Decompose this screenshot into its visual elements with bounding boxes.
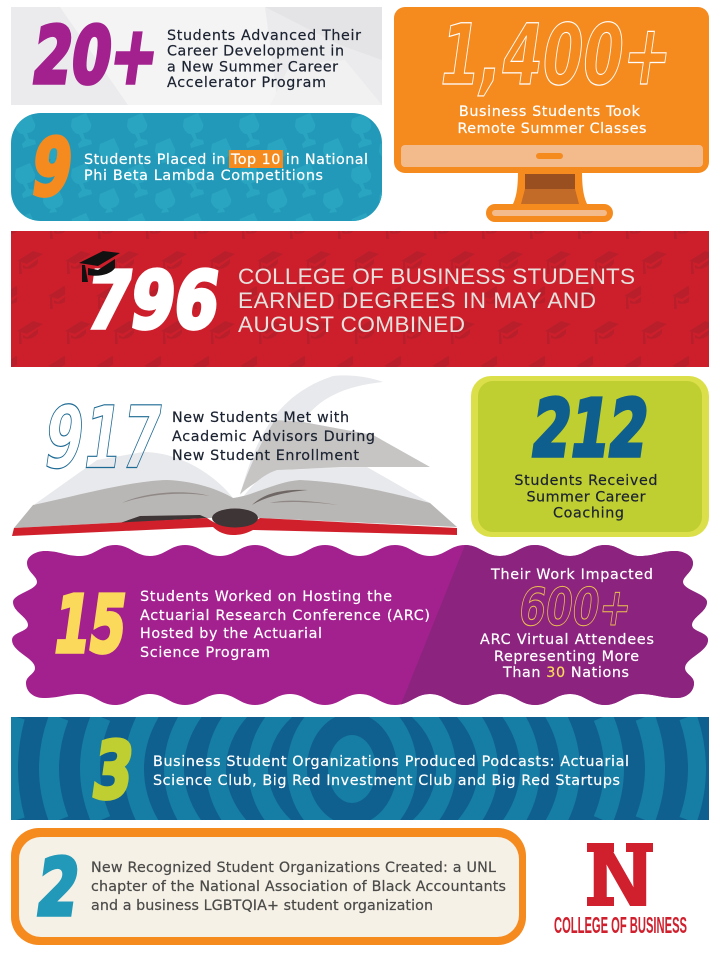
text: attendees description: ARC Virtual Attendees bbox=[480, 632, 654, 648]
text: coaching description: Students Received bbox=[514, 473, 657, 489]
stat: 3: 3 bbox=[87, 726, 139, 816]
stat: 20+: 20+ bbox=[27, 11, 164, 101]
text: organizations description: New Recognized Student Organizations Created: a UNL bbox=[91, 860, 496, 876]
panel: computer monitor with remote classes bbox=[394, 6, 709, 222]
stat: 2: 2 bbox=[31, 843, 85, 933]
text: degrees description: AUGUST COMBINED bbox=[238, 312, 465, 337]
text: competitions description: Students Placed in Top 10 in National bbox=[84, 152, 368, 168]
text: career accelerator description: a New Summer Career bbox=[167, 60, 338, 76]
icon: graduation cap bbox=[79, 251, 120, 282]
text: career accelerator description: Accelerator Program bbox=[167, 75, 326, 91]
text: advisors description: New Student Enrollment bbox=[172, 448, 359, 464]
stat: 9: 9 bbox=[26, 123, 78, 213]
text: conference description: Actuarial Research Conference (ARC) bbox=[140, 608, 430, 624]
text: attendees description: Than 30 Nations bbox=[503, 665, 629, 681]
text: degrees description: COLLEGE OF BUSINESS STUDENTS bbox=[238, 264, 635, 289]
text: conference description: Hosted by the Actuarial bbox=[140, 626, 322, 642]
text: attendees description: Representing More bbox=[494, 649, 639, 665]
panel: career coaching bbox=[471, 376, 709, 537]
panel: podcasts banner bbox=[11, 717, 709, 820]
stat: 15: 15 bbox=[48, 580, 132, 670]
stat: 600+: 600+ bbox=[515, 578, 636, 638]
panel: actuarial research conference bbox=[12, 545, 708, 705]
text: podcasts description: Business Student Organizations Produced Podcasts: Actuarial bbox=[153, 754, 629, 770]
text: conference description: Science Program bbox=[140, 645, 270, 661]
panel: career accelerator bbox=[11, 7, 382, 105]
text: remote classes description: Remote Summer Classes bbox=[458, 121, 646, 137]
text: coaching description: Coaching bbox=[553, 506, 624, 522]
stat: 212: 212 bbox=[526, 384, 654, 474]
text: advisors description: New Students Met with bbox=[172, 410, 349, 426]
text: podcasts description: Science Club, Big Red Investment Club and Big Red Startups bbox=[153, 773, 620, 789]
panel: new student enrollment book bbox=[12, 375, 457, 536]
text: impact intro: Their Work Impacted bbox=[490, 567, 653, 583]
icon: open book bbox=[12, 375, 457, 536]
text: organizations description: and a business LGBTQIA+ student organization bbox=[91, 898, 433, 914]
panel: Phi Beta Lambda competitions bbox=[11, 113, 382, 221]
icon: block N: N bbox=[589, 829, 651, 924]
text: remote classes description: Business Students Took bbox=[459, 104, 641, 120]
stat: 796: 796 bbox=[81, 256, 225, 346]
text: career accelerator description: Career Development in bbox=[167, 44, 344, 60]
stat: 917: 917 bbox=[38, 389, 168, 488]
text: conference description: Students Worked on Hosting the bbox=[140, 589, 392, 605]
text: competitions description: Phi Beta Lambda Competitions bbox=[84, 168, 323, 184]
text: coaching description: Summer Career bbox=[526, 490, 646, 506]
logo: Nebraska N College of Business bbox=[554, 829, 687, 938]
text: advisors description: Academic Advisors During bbox=[172, 429, 375, 445]
highlight: top 10 bbox=[229, 150, 283, 168]
text: career accelerator description: Students Advanced Their bbox=[167, 28, 361, 44]
panel: degrees earned banner bbox=[11, 231, 709, 367]
text: organizations description: chapter of the National Association of Black Accountants bbox=[91, 879, 506, 895]
text: degrees description: EARNED DEGREES IN MAY AND bbox=[238, 288, 596, 313]
panel: new student organizations bbox=[11, 828, 526, 945]
icon: monitor stand bbox=[486, 170, 613, 222]
